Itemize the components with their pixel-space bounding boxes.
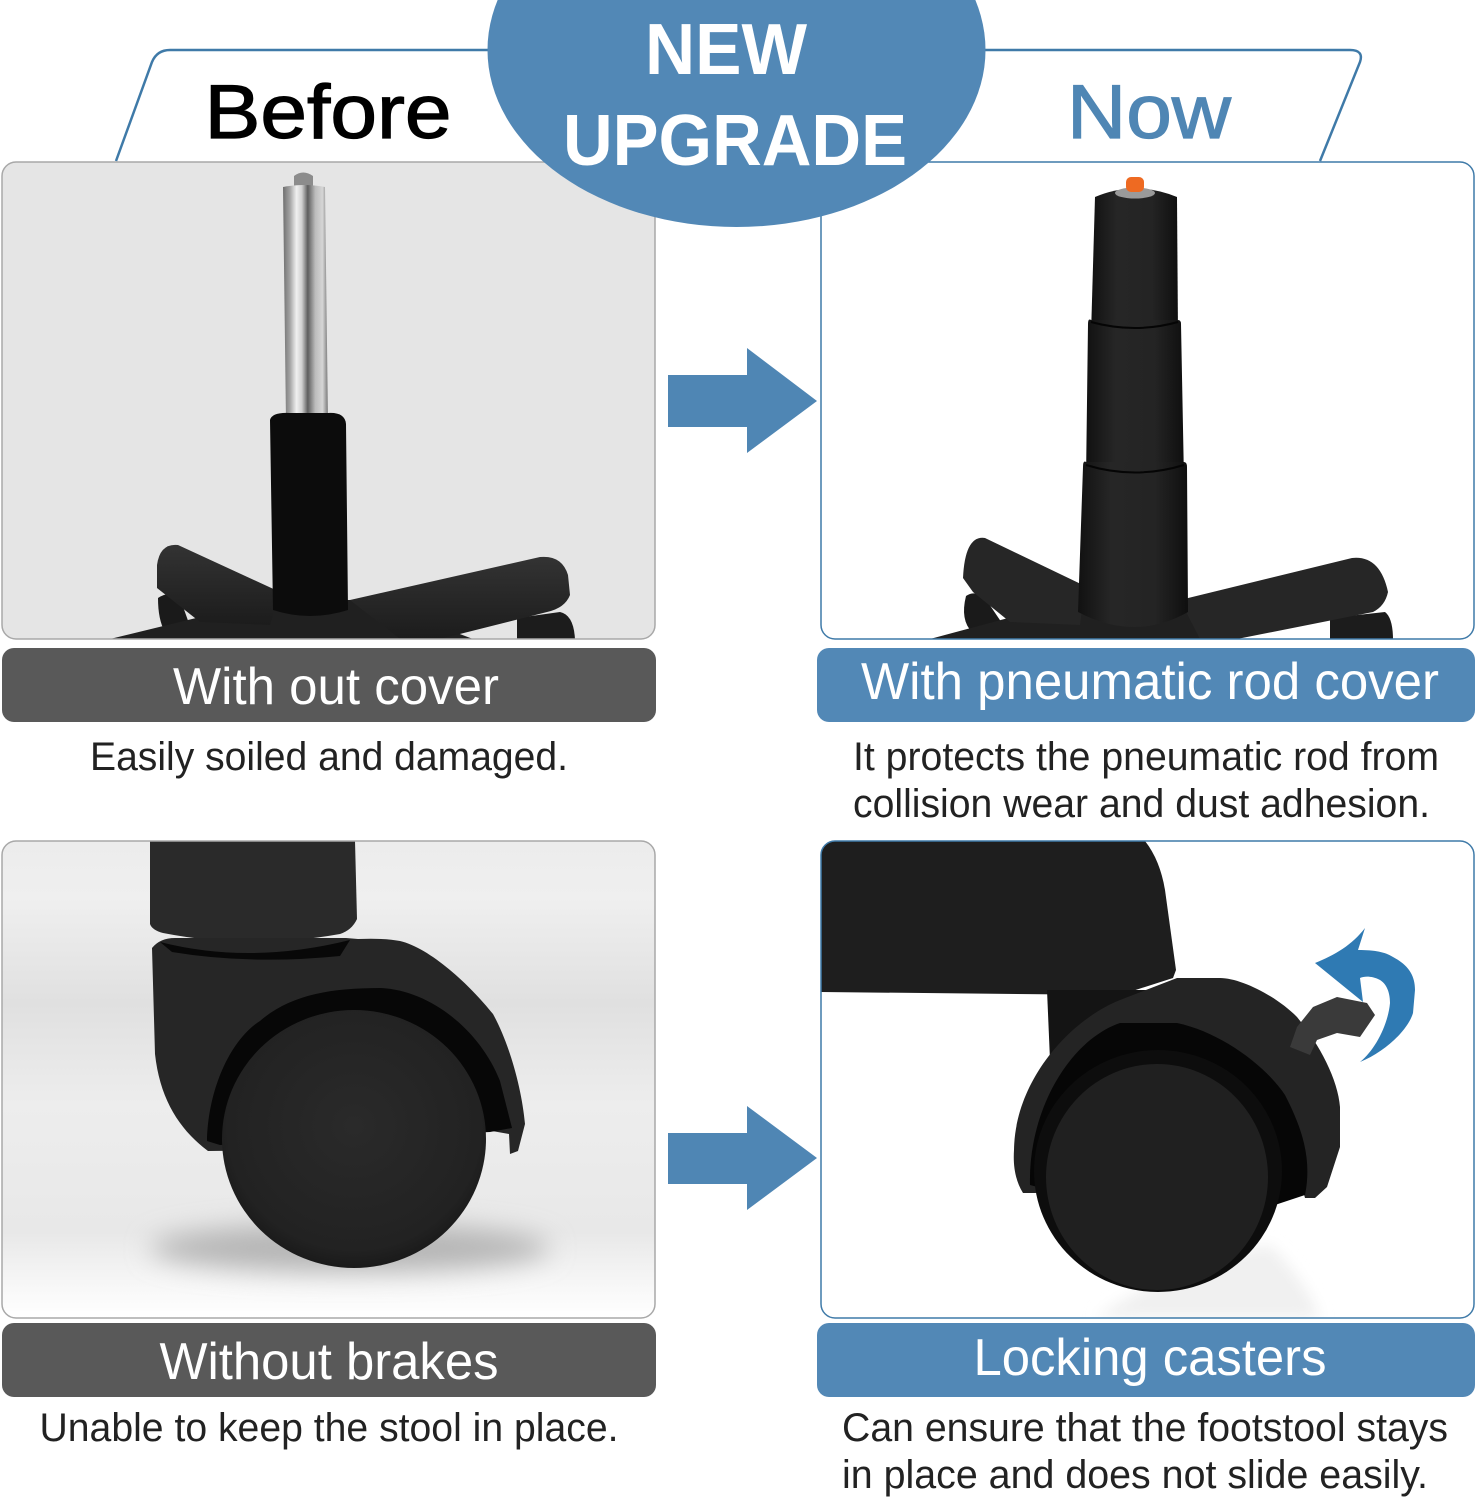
now tab outline: [970, 50, 1361, 161]
panel border: [2, 162, 655, 639]
text: can ensure: Can ensure that the footstool stays: [842, 1406, 1448, 1450]
label bar: with out cover: With out cover: [173, 658, 499, 716]
panel: locking caster photo: [821, 841, 1474, 1318]
text: it protects: It protects the pneumatic rod from: [853, 735, 1439, 779]
icon: covered rod: [1078, 177, 1188, 627]
icon: five star base: [110, 545, 575, 640]
icon: curved arrow: [1315, 928, 1415, 1062]
icon: caster hood with brake: [1014, 978, 1375, 1204]
icon: caster stem: [150, 841, 357, 942]
text: unable: Unable to keep the stool in place.: [40, 1406, 618, 1450]
label bar: locking casters: Locking casters: [974, 1329, 1326, 1387]
text: can ensure: [842, 1406, 1448, 1497]
label bar: locking casters: [817, 1323, 1475, 1397]
heading: now: Now: [1067, 70, 1232, 155]
icon: caster hood: [152, 938, 525, 1154]
label bar: with pneumatic rod cover: With pneumatic rod cover: [861, 653, 1439, 711]
icon: base arm: [821, 841, 1176, 995]
label bar: with out cover: [2, 648, 656, 722]
icon: chrome pneumatic rod: [270, 172, 348, 616]
text: it protects: collision wear and dust adhesion.: [853, 782, 1430, 826]
icon: caster wheel: [1034, 1050, 1282, 1292]
text: it protects: [853, 735, 1439, 826]
arrow: top: [668, 348, 817, 453]
icon: five star base: [930, 538, 1393, 640]
icon: caster wheel: [222, 1010, 486, 1268]
badge: new upgrade: NEW: [645, 10, 807, 90]
badge: new upgrade: UPGRADE: [563, 101, 907, 181]
label bar: without brakes: [2, 1323, 656, 1397]
arrow: bottom: [668, 1106, 817, 1210]
panel: before rod photo: [2, 162, 655, 640]
label bar: without brakes: Without brakes: [160, 1333, 498, 1391]
text: easily soiled: Easily soiled and damaged.: [90, 735, 568, 779]
badge: new upgrade: [488, 0, 986, 227]
text: can ensure: in place and does not slide easily.: [842, 1453, 1428, 1497]
before tab outline: [116, 50, 500, 161]
panel: caster without brakes photo: [2, 841, 655, 1318]
heading: before: Before: [204, 70, 452, 155]
panel: now rod photo: [932, 177, 1393, 638]
